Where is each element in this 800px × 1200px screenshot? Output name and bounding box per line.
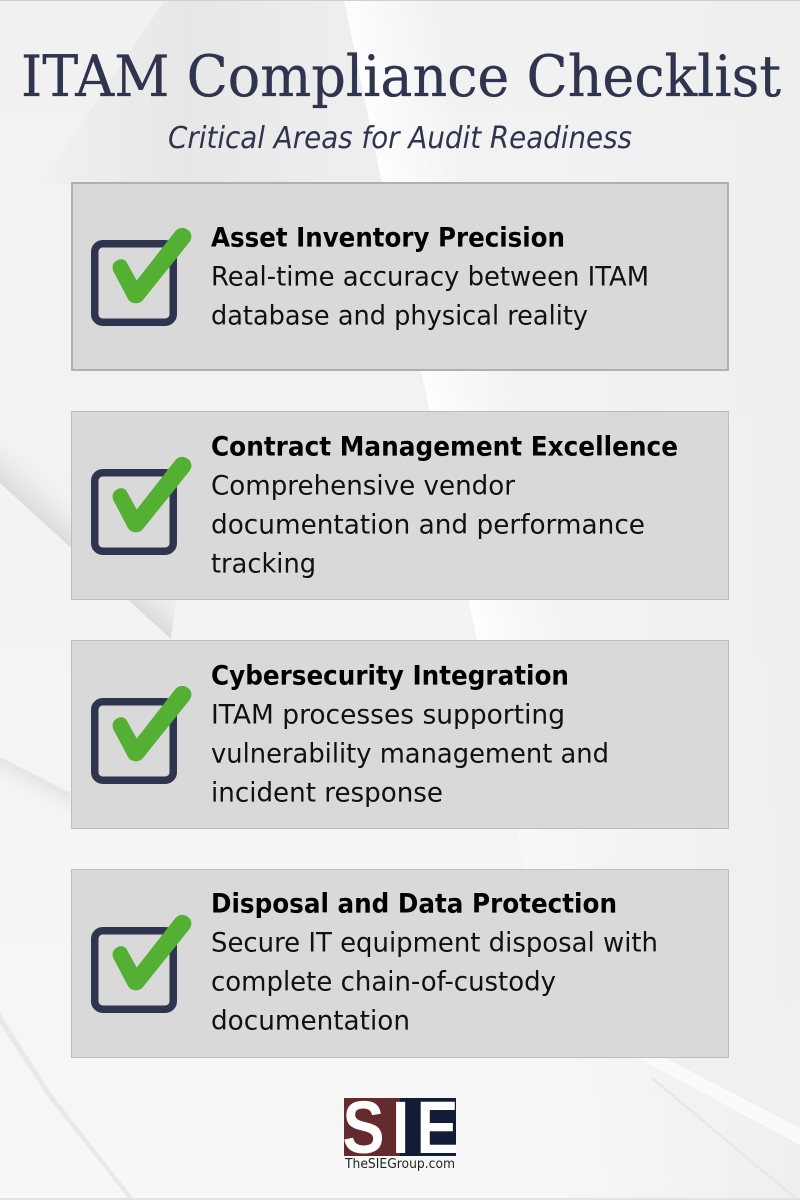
text: asset inventory description: database and physical reality	[211, 300, 588, 332]
text: contract management description: tracking	[211, 548, 316, 580]
text: contract management description: Comprehensive vendor	[211, 470, 515, 502]
text: cybersecurity description: ITAM processes supporting	[211, 700, 565, 730]
text: cybersecurity description: vulnerability management and	[211, 738, 609, 770]
icon: checkbox 2	[95, 457, 191, 551]
heading: disposal: Disposal and Data Protection	[211, 888, 617, 920]
heading: asset inventory: Asset Inventory Precision	[211, 222, 565, 254]
logo: SIE	[343, 1086, 458, 1169]
text: cybersecurity description: incident response	[211, 778, 443, 808]
text: disposal description	[211, 928, 658, 1036]
logo: TheSIEGroup.com	[344, 1157, 455, 1172]
heading: contract management: Contract Management Excellence	[211, 432, 678, 462]
text: disposal description: documentation	[211, 1006, 410, 1036]
panel: contract management	[72, 412, 728, 600]
icon: checkbox 3	[95, 686, 191, 780]
subtitle: Critical Areas for Audit Readiness	[168, 121, 632, 156]
text: cybersecurity description	[211, 700, 609, 808]
text: disposal description: Secure IT equipment disposal with	[211, 928, 658, 958]
panel: asset inventory	[72, 183, 728, 370]
text: contract management description: documentation and performance	[211, 510, 645, 540]
icon: checkbox 4	[95, 915, 191, 1009]
panel: cybersecurity	[72, 640, 728, 828]
text: asset inventory description: Real-time accuracy between ITAM	[211, 262, 649, 292]
text: disposal description: complete chain-of-custody	[211, 966, 556, 998]
icon: checkbox 1	[95, 228, 191, 322]
text: contract management description	[211, 470, 645, 580]
heading: cybersecurity: Cybersecurity Integration	[211, 660, 569, 692]
panel: disposal	[72, 870, 728, 1058]
text: asset inventory description	[211, 262, 649, 332]
